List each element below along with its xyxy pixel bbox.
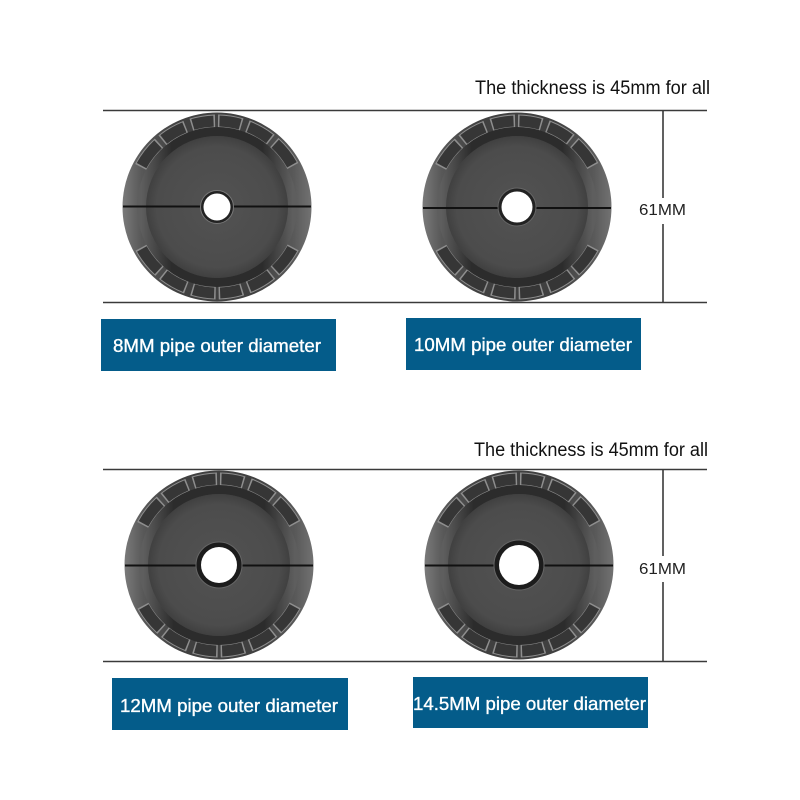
label: 8MM — [101, 319, 336, 371]
label: 12MM — [112, 678, 348, 730]
label: 12MM: 12MM pipe outer diameter — [120, 696, 338, 716]
bottom panel: 12MM and 14.5MM sizes — [103, 440, 708, 730]
thickness note: The thickness is 45mm for all — [475, 78, 710, 99]
height dimension label — [636, 198, 690, 224]
height dimension label: 61MM — [639, 561, 686, 578]
label: 8MM: 8MM pipe outer diameter — [113, 336, 321, 356]
label: 10MM: 10MM pipe outer diameter — [414, 335, 632, 355]
top panel: 8MM and 10MM sizes — [101, 78, 710, 371]
dimension lines — [103, 469, 707, 662]
product: 12MM clamp — [124, 470, 314, 660]
product: 10MM clamp — [422, 112, 612, 302]
product: 14.5MM clamp — [424, 470, 614, 660]
height dimension label — [636, 556, 690, 582]
dimension lines — [103, 110, 707, 302]
height dimension label: 61MM — [639, 202, 686, 219]
thickness note: The thickness is 45mm for all — [474, 440, 708, 461]
product: 8MM clamp — [122, 112, 312, 302]
label: 14.5MM — [413, 677, 648, 728]
label: 14.5MM: 14.5MM pipe outer diameter — [413, 694, 646, 714]
label: 10MM — [406, 318, 641, 370]
